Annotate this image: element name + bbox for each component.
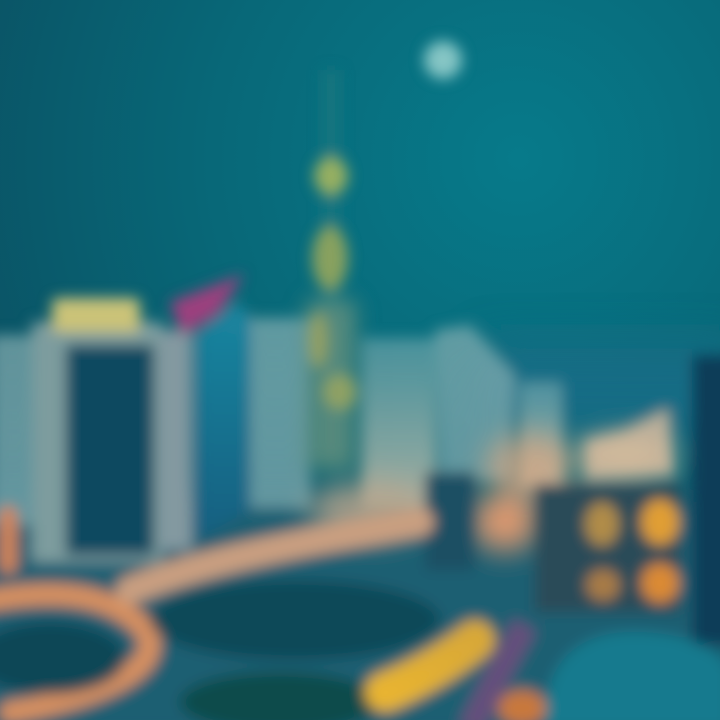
building: left tower with yellow roof: [32, 298, 162, 562]
moon: [424, 41, 462, 79]
building: dark block centre: [425, 472, 475, 570]
road: orange light trails: [0, 515, 420, 712]
foreground: teal dome lower right: [545, 632, 720, 720]
building: tall spire with yellow lights: [306, 70, 357, 470]
building: dark block with lit windows: [535, 484, 680, 612]
group: distant buildings: [0, 318, 675, 525]
background: lower city base: [0, 490, 720, 720]
roundabout: dark circular pools: [0, 580, 440, 720]
road: yellow highlight: [385, 640, 475, 692]
horizon haze: [480, 345, 720, 435]
building: teal tower with magenta roof: [160, 274, 252, 550]
road: purple edge strip: [470, 625, 525, 720]
warm glow: city lights: [308, 433, 675, 550]
road: orange corner glow: [498, 690, 546, 720]
building: dark tower at right edge: [692, 355, 720, 645]
